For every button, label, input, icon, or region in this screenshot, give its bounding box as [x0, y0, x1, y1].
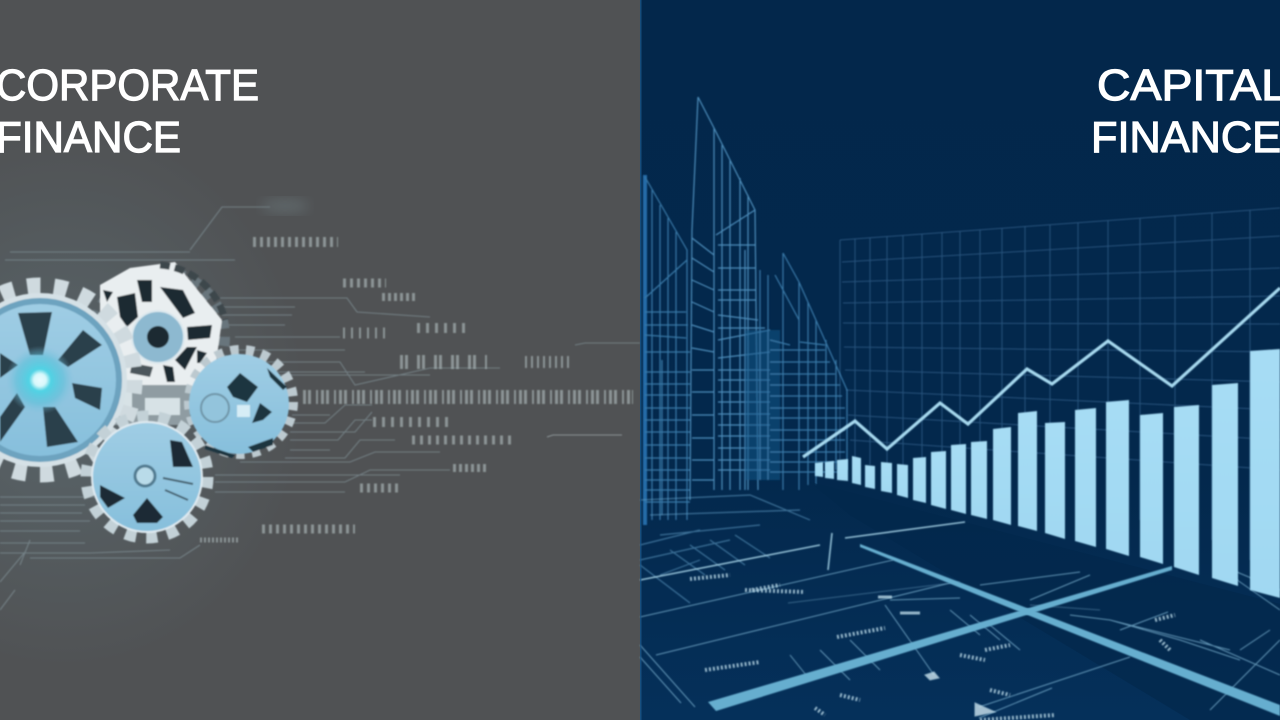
- heading: corporate finance: CORPORATE: [0, 61, 259, 110]
- gears cluster: [0, 262, 291, 537]
- floor blueprint lines: [640, 495, 1280, 718]
- building: left tower: [645, 175, 690, 525]
- perspective grid wall: [840, 208, 1280, 560]
- dark floor under bars: [810, 482, 1280, 720]
- circuit traces: [0, 207, 640, 610]
- heading: capital finance: CAPITAL: [1097, 61, 1280, 110]
- gear: right blue gear: [189, 352, 291, 458]
- panel: corporate finance background: [0, 0, 640, 720]
- building: central spire: [690, 97, 780, 500]
- data glyph rows: [200, 242, 633, 540]
- trend line: [803, 288, 1280, 457]
- gear: lower blue gear: [87, 417, 207, 537]
- gear: white upper gear: [94, 262, 225, 425]
- bar chart: [815, 349, 1280, 598]
- wireframe buildings: [645, 97, 847, 525]
- building: right tower: [760, 253, 847, 490]
- heading: capital finance second line: FINANCE: [1091, 113, 1280, 162]
- fuzzy light flare: [261, 198, 309, 214]
- divider between panels: [640, 0, 642, 720]
- gear: large cyan gear: [0, 288, 132, 472]
- floor main beam: rising: [708, 566, 1172, 711]
- panel: capital finance background: [640, 0, 1280, 720]
- heading: corporate finance second line: FINANCE: [0, 113, 181, 162]
- floor dimension marks: [690, 575, 1175, 720]
- floor main beam: descending: [860, 544, 1280, 716]
